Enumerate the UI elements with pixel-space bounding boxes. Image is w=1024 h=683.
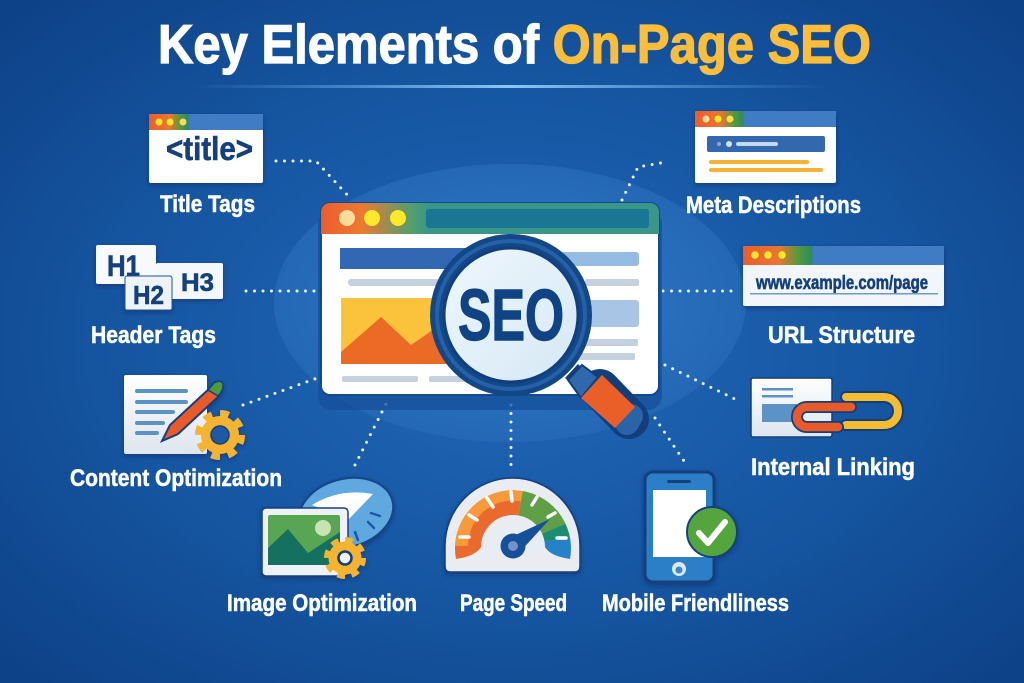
hero image bbox=[341, 298, 461, 364]
label: Content Optimization bbox=[70, 465, 282, 492]
icon: phone with checkmark bbox=[645, 472, 737, 582]
label: Title Tags bbox=[160, 191, 255, 218]
gauge needle bbox=[500, 519, 550, 558]
browser title bar bbox=[321, 203, 659, 234]
icon: speedometer bbox=[442, 477, 582, 576]
panel: header tags bbox=[91, 245, 223, 349]
label: Header Tags bbox=[91, 322, 216, 349]
label: Meta Descriptions bbox=[686, 192, 861, 219]
window dots bbox=[339, 210, 406, 226]
title: Key Elements of On-Page SEO bbox=[158, 13, 871, 75]
panel: page speed bbox=[442, 477, 582, 616]
label: Internal Linking bbox=[751, 454, 915, 481]
icon: image, badge and gear bbox=[262, 468, 401, 576]
icon: H1 H2 H3 cards: H3 bbox=[181, 269, 214, 297]
title underline bbox=[190, 85, 830, 88]
gauge ticks bbox=[460, 492, 566, 538]
panel: image optimization bbox=[227, 468, 417, 617]
blue content block bbox=[570, 300, 639, 327]
label: Mobile Friendliness bbox=[602, 590, 789, 617]
icon: URL window bbox=[743, 246, 944, 306]
label: Image Optimization bbox=[227, 590, 417, 617]
browser shadow bbox=[318, 210, 662, 410]
browser window bbox=[321, 203, 659, 395]
SEO lens text: SEO bbox=[458, 276, 564, 356]
dotted connectors bbox=[243, 161, 741, 470]
magnifier handle bbox=[565, 364, 635, 428]
icon: H1 H2 H3 cards bbox=[96, 245, 223, 310]
panel: internal linking bbox=[751, 378, 915, 481]
address bar bbox=[426, 209, 649, 228]
icon: title tag window: <title> bbox=[166, 130, 253, 167]
panel: content optimization bbox=[70, 375, 282, 492]
icon: URL window: www.example.com/page bbox=[755, 273, 928, 294]
panel: mobile friendliness bbox=[602, 472, 789, 617]
magnifier lens bbox=[430, 234, 592, 396]
panel: title tags bbox=[149, 114, 263, 218]
page text lines bbox=[342, 279, 639, 382]
label: URL Structure bbox=[768, 322, 915, 349]
panel: url structure bbox=[743, 246, 944, 349]
icon: document and chain link bbox=[751, 378, 898, 437]
icon: H1 H2 H3 cards: H2 bbox=[133, 280, 164, 310]
panel: central browser with magnifier bbox=[318, 203, 662, 428]
icon: H1 H2 H3 cards: H1 bbox=[107, 250, 140, 283]
panel: meta descriptions bbox=[686, 111, 861, 219]
label: Page Speed bbox=[460, 590, 567, 617]
gauge colour bands bbox=[455, 490, 571, 559]
icon: document, pencil and gear bbox=[124, 375, 241, 456]
central glow ellipse bbox=[274, 164, 746, 442]
icon: meta window bbox=[695, 111, 836, 183]
page header bars bbox=[340, 248, 639, 269]
